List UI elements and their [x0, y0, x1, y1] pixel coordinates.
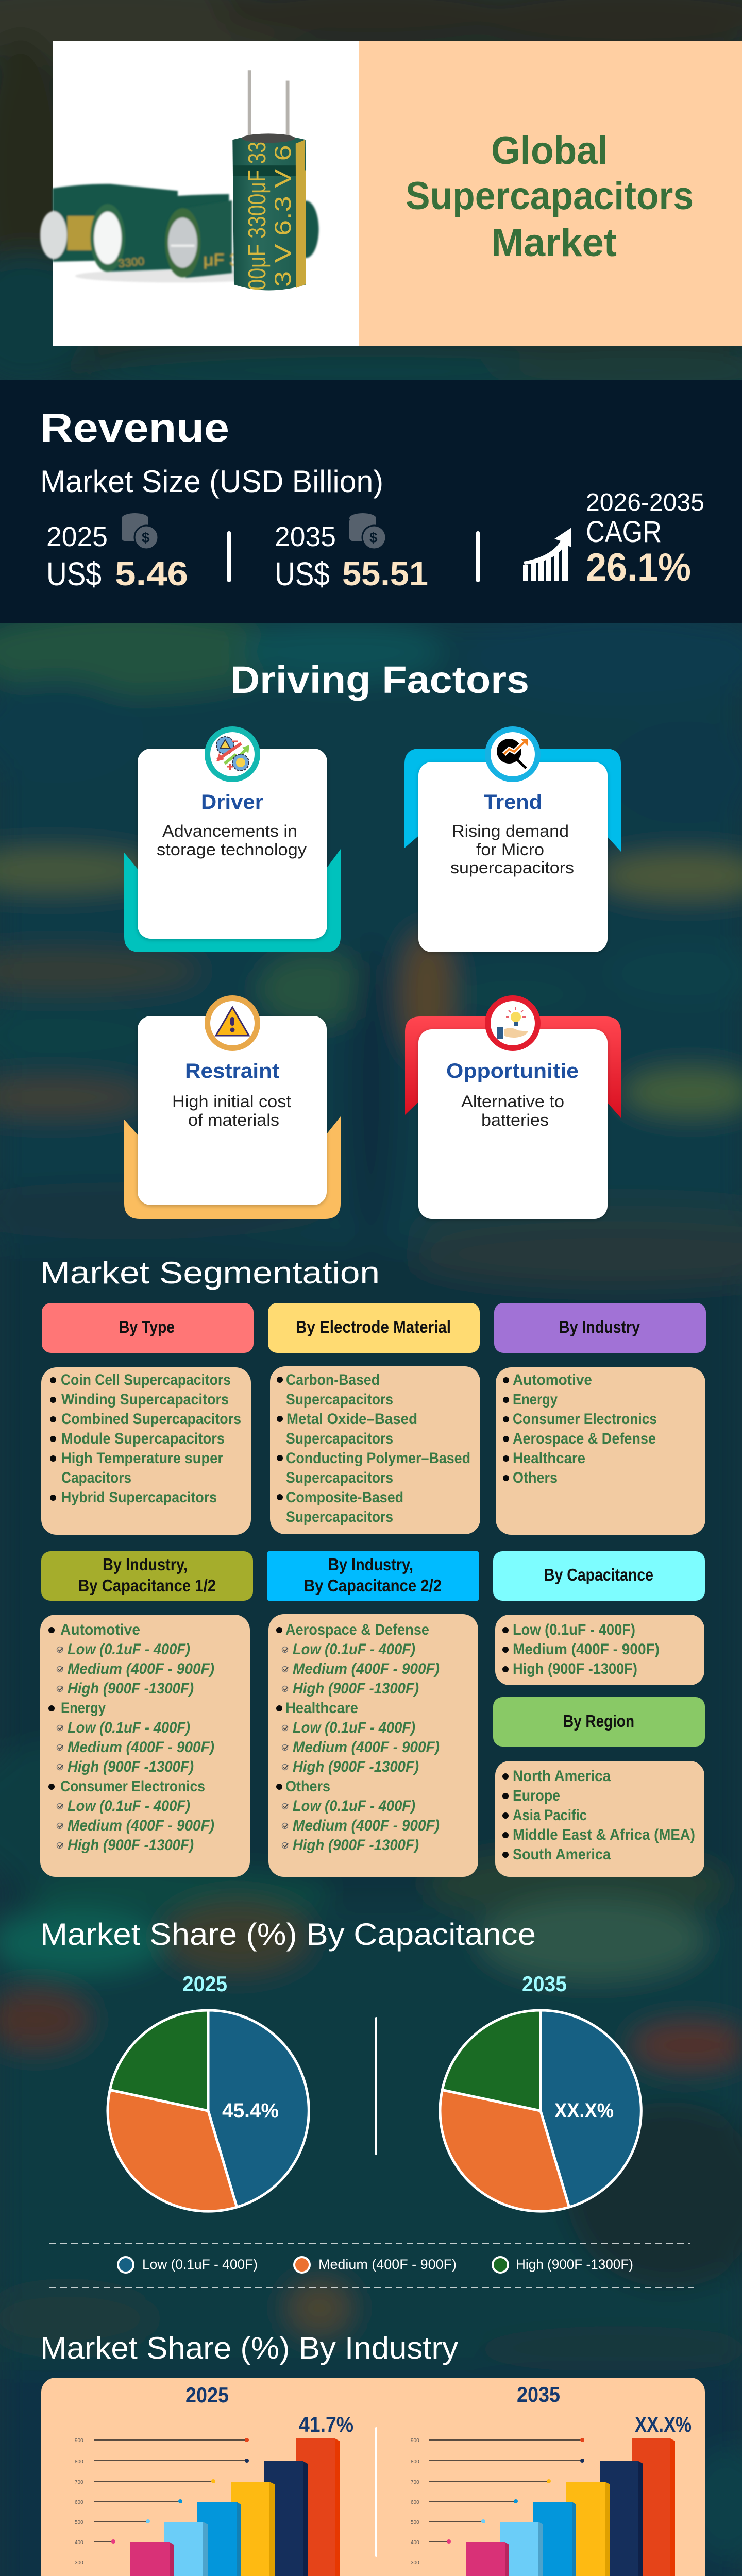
text: restraint: High initial cost: [172, 1092, 291, 1111]
icon: coins 2025: [122, 513, 158, 549]
list: by industry: Energy: [513, 1391, 558, 1408]
heading: market segmentation: Market Segmentation: [40, 1256, 380, 1290]
list: by industry by capacitance 2/2: High (900F -1300F): [293, 1758, 419, 1775]
list: by electrode material: Composite-Based: [286, 1489, 403, 1506]
chart: industry bars 2025: 41.7%: [299, 2412, 353, 2436]
heading: market share by industry: Market Share (%) By Industry: [40, 2331, 458, 2365]
chart: industry bars 2035: 500: [411, 2520, 419, 2526]
list: by electrode material: Carbon-Based: [286, 1371, 380, 1388]
list: by region: Europe: [513, 1787, 560, 1804]
heading: driving factors: Driving Factors: [230, 658, 529, 701]
text: restraint: [172, 1060, 291, 1129]
text: trend: for Micro: [476, 840, 544, 859]
header: by industry by capacitance 2/2: By Capacitance 2/2: [304, 1576, 442, 1595]
list: by industry by capacitance 2/2: Aerospace & Defense: [285, 1621, 429, 1638]
list: by industry: Healthcare: [513, 1450, 585, 1467]
image: capacitors photo: 00μF 3300μF 33: [243, 142, 271, 290]
card: restraint: [124, 995, 341, 1219]
heading: global supercapacitors market: [406, 129, 694, 265]
list: by industry by capacitance 2/2: High (900F -1300F): [293, 1680, 419, 1697]
list: by industry: [496, 1367, 705, 1535]
icon: coins 2025: $: [142, 530, 150, 546]
stat: cagr: 26.1%: [586, 546, 691, 589]
stat: 2035 revenue: 2035: [275, 521, 336, 552]
icon: opportunity bulb in hand: [485, 995, 541, 1051]
list: by industry by capacitance 1/2: [40, 1615, 250, 1877]
card: trend: [404, 726, 621, 952]
chart: industry bars 2025: 600: [75, 2500, 83, 2505]
list: by industry by capacitance 2/2: Medium (400F - 900F): [293, 1817, 440, 1834]
header: by capacitance: [493, 1551, 705, 1601]
legend: capacitance: Medium (400F - 900F): [318, 2257, 457, 2272]
list: by type: Winding Supercapacitors: [61, 1391, 229, 1408]
chart: industry bars 2035: 2035: [517, 2382, 560, 2406]
legend: capacitance: High (900F -1300F): [516, 2257, 633, 2272]
stat: cagr: CAGR: [586, 515, 662, 549]
list: by industry by capacitance 1/2: Medium (400F - 900F): [68, 1660, 214, 1677]
text: trend: Trend: [484, 791, 542, 814]
list: by industry by capacitance 1/2: High (900F -1300F): [68, 1837, 194, 1854]
chart: capacitance pie 2025: 2025: [182, 1972, 227, 1996]
list: by electrode material: Conducting Polymer–Based: [286, 1450, 470, 1467]
list: by capacitance: Low (0.1uF - 400F): [513, 1621, 635, 1638]
text: opportunity: Opportunitie: [446, 1060, 579, 1082]
chart: industry bars 2035: 300: [411, 2560, 419, 2566]
stat: 2035 revenue: US$: [275, 555, 330, 592]
list: by industry: Aerospace & Defense: [513, 1430, 656, 1447]
text: restraint: Restraint: [185, 1060, 279, 1082]
list: by industry by capacitance 2/2: Low (0.1uF - 400F): [293, 1641, 415, 1658]
header: by type: By Type: [119, 1317, 175, 1336]
chart: industry bars 2025: 900: [75, 2438, 83, 2444]
list: by region: Asia Pacific: [513, 1807, 587, 1824]
list: by industry by capacitance 2/2: Healthcare: [285, 1700, 358, 1717]
divider 2025-2035: [227, 531, 231, 582]
list: by industry: Others: [513, 1469, 558, 1486]
list: by industry by capacitance 2/2: Medium (400F - 900F): [293, 1739, 440, 1756]
legend: capacitance: Low (0.1uF - 400F): [142, 2257, 258, 2272]
list: by industry by capacitance 2/2: Others: [285, 1778, 330, 1795]
chart: capacitance pie 2035: XX.X%: [554, 2099, 614, 2122]
heading: revenue: Revenue: [40, 405, 229, 450]
divider 2035-cagr: [476, 531, 480, 582]
stat: cagr: 2026-2035: [586, 489, 704, 516]
list: by type: Hybrid Supercapacitors: [61, 1489, 217, 1506]
list: by region: South America: [513, 1846, 611, 1863]
heading: global supercapacitors market: Market: [491, 221, 617, 265]
heading: global supercapacitors market: Global: [491, 129, 608, 173]
card: opportunity: [405, 995, 621, 1219]
header: by industry by capacitance 1/2: By Industry,: [103, 1555, 188, 1574]
chart: industry bars 2025: 500: [75, 2520, 83, 2526]
list: by industry by capacitance 1/2: High (900F -1300F): [68, 1680, 194, 1697]
chart: industry bars 2035: [411, 2382, 692, 2576]
list: by industry by capacitance 1/2: Medium (400F - 900F): [68, 1739, 214, 1756]
list: by industry: Consumer Electronics: [513, 1411, 657, 1428]
list: by industry by capacitance 2/2: High (900F -1300F): [293, 1837, 419, 1854]
chart: industry bars 2035: 400: [411, 2540, 419, 2546]
text: opportunity: [446, 1060, 579, 1129]
image: capacitors photo: 3 V 6.3 V 6: [271, 145, 296, 287]
header: by industry by capacitance 1/2: By Capacitance 1/2: [78, 1576, 216, 1595]
image: capacitors photo: 3300: [117, 255, 145, 270]
icon: driver gears and arrows: [205, 726, 260, 782]
panel: industry bar charts: [41, 2378, 705, 2576]
stat: 2025 revenue: US$: [46, 555, 102, 592]
list: by capacitance: High (900F -1300F): [513, 1660, 637, 1677]
chart: industry bars 2035: 800: [411, 2459, 419, 2465]
chart: capacitance pie 2035: 2035: [522, 1972, 567, 1996]
list: by electrode material: Supercapacitors: [286, 1430, 393, 1447]
divider between pies: [375, 2017, 377, 2155]
list: by type: Coin Cell Supercapacitors: [61, 1371, 231, 1388]
header: by capacitance: By Capacitance: [544, 1565, 653, 1584]
list: by industry by capacitance 1/2: Medium (400F - 900F): [68, 1817, 214, 1834]
icon: trend magnifier: [485, 726, 541, 782]
list: by industry by capacitance 1/2: Automotive: [60, 1621, 140, 1638]
list: by industry by capacitance 1/2: High (900F -1300F): [68, 1758, 194, 1775]
image: capacitors photo: [40, 70, 319, 290]
text: driver: Advancements in: [162, 822, 297, 840]
header: by electrode material: By Electrode Material: [296, 1317, 451, 1336]
stat: 2025 revenue: [46, 521, 188, 592]
list: by electrode material: Supercapacitors: [286, 1509, 393, 1526]
list: by industry by capacitance 2/2: [268, 1614, 478, 1877]
list: by electrode material: Supercapacitors: [286, 1391, 393, 1408]
chart: industry bars 2035: XX.X%: [635, 2412, 692, 2436]
header: by region: [493, 1697, 705, 1747]
list: by industry by capacitance 2/2: Medium (400F - 900F): [293, 1660, 440, 1677]
icon: rising chart arrow: [523, 528, 571, 581]
list: by capacitance: Medium (400F - 900F): [513, 1641, 660, 1658]
list: by region: Middle East & Africa (MEA): [513, 1826, 695, 1843]
panel: revenue: [0, 380, 742, 623]
text: restraint: of materials: [188, 1111, 279, 1129]
list: by type: [41, 1367, 251, 1535]
stat: 2025 revenue: 5.46: [115, 554, 188, 592]
list: by industry by capacitance 2/2: Low (0.1uF - 400F): [293, 1798, 415, 1815]
chart: industry bars 2035: 900: [411, 2438, 419, 2444]
chart: industry bars 2025: 800: [75, 2459, 83, 2465]
list: by industry by capacitance 1/2: Low (0.1uF - 400F): [68, 1798, 190, 1815]
text: driver: storage technology: [157, 840, 307, 859]
list: by electrode material: Metal Oxide–Based: [286, 1411, 417, 1428]
list: by electrode material: [270, 1366, 480, 1534]
text: trend: supercapacitors: [450, 858, 574, 877]
stat: cagr: [586, 489, 704, 589]
icon: restraint warning: [205, 995, 260, 1051]
list: by electrode material: Supercapacitors: [286, 1469, 393, 1486]
list: by type: Combined Supercapacitors: [61, 1411, 241, 1428]
header: by industry: By Industry: [559, 1317, 640, 1336]
image: capacitors photo: μF 3: [204, 250, 239, 269]
list: by industry by capacitance 1/2: Low (0.1uF - 400F): [68, 1719, 190, 1736]
chart: industry bars 2025: 2025: [185, 2383, 229, 2407]
chart: capacitance pie 2025: 45.4%: [222, 2099, 279, 2122]
text: opportunity: Alternative to: [461, 1092, 564, 1111]
chart: industry bars 2035: 600: [411, 2500, 419, 2505]
chart: capacitance pie 2025: [108, 1972, 309, 2211]
header: by industry by capacitance 1/2: [41, 1551, 253, 1601]
chart: industry bars 2025: [75, 2383, 353, 2576]
text: driver: Driver: [201, 791, 263, 814]
stat: 2035 revenue: [275, 521, 428, 592]
panel: title banner: [40, 41, 742, 346]
chart: capacitance pie 2035: [440, 1972, 641, 2211]
divider between bar charts: [375, 2427, 377, 2557]
heading: global supercapacitors market: Supercapacitors: [406, 174, 694, 218]
list: by industry by capacitance 1/2: Energy: [61, 1700, 106, 1717]
header: by industry: [494, 1303, 706, 1353]
list: by capacitance: [495, 1615, 704, 1685]
text: trend: [450, 791, 574, 877]
text: market size: Market Size (USD Billion): [40, 464, 383, 499]
list: by region: [495, 1761, 704, 1877]
icon: coins 2035: [349, 513, 386, 549]
chart: industry bars 2025: 400: [75, 2540, 83, 2546]
legend: capacitance: [118, 2257, 633, 2273]
list: by industry by capacitance 1/2: Low (0.1uF - 400F): [68, 1641, 190, 1658]
list: by type: Module Supercapacitors: [61, 1430, 225, 1447]
card: driver: [124, 726, 341, 952]
header: by electrode material: [268, 1303, 480, 1353]
chart: industry bars 2025: 700: [75, 2480, 83, 2485]
list: by industry by capacitance 2/2: Low (0.1uF - 400F): [293, 1719, 415, 1736]
header: by industry by capacitance 2/2: [267, 1551, 479, 1601]
chart: industry bars 2025: 300: [75, 2560, 83, 2566]
text: driver: [157, 791, 307, 859]
icon: coins 2035: $: [369, 530, 378, 546]
text: opportunity: batteries: [481, 1111, 549, 1129]
list: by region: North America: [513, 1768, 611, 1785]
header: by type: [42, 1303, 254, 1353]
text: trend: Rising demand: [452, 822, 569, 840]
header: by region: By Region: [563, 1711, 634, 1731]
list: by type: Capacitors: [61, 1469, 131, 1486]
list: by industry: Automotive: [513, 1371, 592, 1388]
heading: market share by capacitance: Market Share (%) By Capacitance: [40, 1917, 536, 1952]
list: by industry by capacitance 1/2: Consumer Electronics: [60, 1778, 205, 1795]
stat: 2035 revenue: 55.51: [342, 554, 428, 592]
chart: industry bars 2035: 700: [411, 2480, 419, 2485]
stat: 2025 revenue: 2025: [46, 521, 108, 552]
header: by industry by capacitance 2/2: By Industry,: [328, 1555, 413, 1574]
list: by type: High Temperature super: [61, 1450, 223, 1467]
